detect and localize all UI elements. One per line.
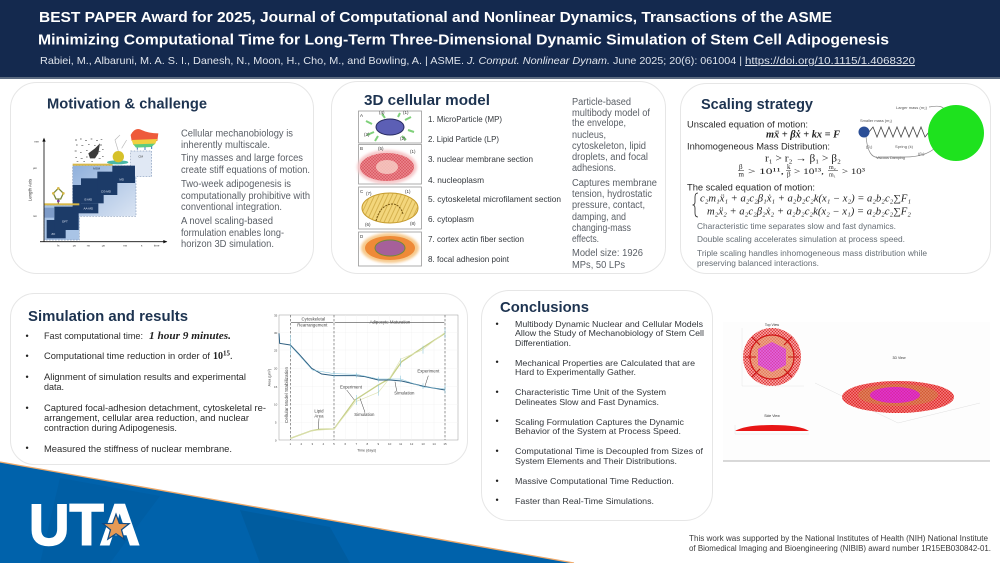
- side view: [735, 414, 809, 434]
- chart: cell and lipid area over time: 25: [274, 348, 278, 352]
- chart: cell and lipid area over time: Simulation: [354, 412, 375, 417]
- chart: length and time scale map: ZC: [51, 232, 56, 236]
- chart: cell and lipid area over time: 2: [300, 442, 302, 446]
- text: results bullets: arrangement, cellular area reduction, and nuclear: [44, 413, 249, 424]
- icon: yellow cell: [107, 160, 128, 164]
- text: model description: Captures membrane: [572, 178, 657, 189]
- figure: cell layers A to D: (1): [410, 149, 416, 154]
- figure: cell layers A to D: (2): [364, 132, 370, 137]
- list: model components: 5. cytoskeletal microfilament section: [428, 194, 561, 204]
- small mass: [858, 126, 870, 138]
- figure: cell layers A to D: [357, 110, 422, 266]
- chart: length and time scale map: CM: [138, 155, 143, 159]
- chart: cell and lipid area over time: 5: [275, 421, 277, 425]
- chart: cell and lipid area over time: 30: [274, 331, 278, 335]
- text: model description: droplets, and focal: [572, 152, 648, 163]
- text: inhomogeneous mass distribution: β: [787, 170, 791, 178]
- text: results bullets: data.: [44, 382, 64, 393]
- text: inhomogeneous mass distribution: m₂: [829, 165, 836, 171]
- big mass: [928, 105, 984, 161]
- text: motivation bullets: Tiny masses and large forces: [181, 153, 303, 164]
- list: model components: 6. cytoplasm: [428, 214, 474, 224]
- chart: cell and lipid area over time: 15: [443, 442, 447, 446]
- header banner: [0, 0, 1000, 79]
- chart: cell and lipid area over time: 13: [421, 442, 425, 446]
- text: motivation bullets: create stiff equations of motion.: [181, 165, 310, 176]
- text: results bullets: contraction during Adipogenesis.: [44, 423, 177, 434]
- text: conclusion bullets: Differentiation.: [515, 338, 571, 348]
- text: inhomogeneous mass distribution: r₁ > r₂ → β₁ > β₂: [765, 154, 841, 164]
- chart: cell and lipid area over time: 0: [275, 438, 277, 442]
- axes: [40, 140, 167, 242]
- text: funding acknowledgement: [689, 534, 991, 553]
- chart: cell and lipid area over time: 14: [432, 442, 436, 446]
- text: conclusion bullets: Delineates Slow and Fast Dynamics.: [515, 397, 659, 407]
- figure: cell layers A to D: C: [360, 189, 364, 194]
- text: scaled equation of motion: The scaled equation of motion:: [687, 182, 815, 194]
- text: motivation bullets: computationally prohibitive with: [181, 191, 310, 202]
- text: model description: damping, and: [572, 212, 626, 223]
- chart: length and time scale map: MD: [119, 178, 125, 182]
- text: conclusion bullets: Computational Time is Decoupled from Sizes of: [515, 446, 704, 456]
- list: model components: 1. MicroParticle (MP): [428, 114, 502, 124]
- figure: cell layers A to D: A: [360, 113, 363, 118]
- text: results bullets: Fast computational time:: [44, 331, 143, 342]
- diagram: two mass spring damper: Viscous Damping: [876, 155, 905, 160]
- chart: cell and lipid area over time: 10: [274, 403, 278, 407]
- text: model description: the envelope,: [572, 118, 626, 129]
- text: model description: multibody model of: [572, 108, 650, 119]
- text: inhomogeneous mass distribution: β: [739, 163, 743, 171]
- chart: cell and lipid area over time: Adipocyte Maturation: [370, 320, 411, 325]
- icon: rainbow surface: [131, 129, 158, 141]
- text: conclusion bullets: Mechanical Properties are Calculated that are: [515, 358, 695, 368]
- text: model description: effects.: [572, 234, 599, 245]
- text: unscaled equation of motion: Unscaled equation of motion:: [687, 120, 808, 130]
- icon: molecule: [53, 188, 63, 204]
- text: motivation bullets: Cellular mechanobiology is: [181, 128, 293, 140]
- text: results bullets: •: [26, 372, 29, 382]
- text: conclusion bullets: •: [496, 319, 499, 329]
- chart: cell and lipid area over time: Time (days): [357, 448, 376, 452]
- chart: cell and lipid area over time: 3: [311, 442, 313, 446]
- text: model description: tension, hydrostatic: [572, 189, 652, 200]
- lipid area curve: [290, 333, 445, 438]
- citation: [40, 55, 915, 67]
- chart: cell and lipid area over time: 1: [289, 442, 291, 446]
- text: results bullets: 10: [213, 351, 223, 362]
- text: results bullets: •: [26, 351, 29, 361]
- figure: cell layers A to D: (7): [366, 191, 372, 196]
- text: inhomogeneous mass distribution: k: [787, 163, 791, 171]
- text: inhomogeneous mass distribution: [687, 142, 866, 178]
- heading: scaling strategy: Scaling strategy: [701, 96, 814, 113]
- text: motivation bullets: inherently multiscale.: [181, 140, 270, 151]
- text: model description: nucleus,: [572, 130, 606, 141]
- chart: length and time scale map: ms: [123, 244, 127, 248]
- chart: cell and lipid area over time: Rearrangement: [297, 322, 328, 327]
- chart: length and time scale map: E-MD: [85, 197, 93, 201]
- citation: June 2025; 20(6): 061004 |: [613, 55, 742, 67]
- text: conclusion bullets: •: [496, 357, 499, 367]
- text: conclusion bullets: Characteristic Time Unit of the System: [515, 387, 666, 397]
- chart: cell and lipid area over time: 35: [274, 313, 278, 317]
- text: scaling bullets: Double scaling accelerates simulation at process speed.: [697, 234, 905, 244]
- text: motivation bullets: A novel scaling-based: [181, 216, 273, 227]
- text: conclusion bullets: •: [496, 446, 499, 456]
- panel: scaling strategy: [680, 84, 990, 274]
- chart: cell and lipid area over time: 9: [377, 442, 379, 446]
- chart: length and time scale map: ps: [73, 244, 76, 248]
- text: unscaled equation of motion: [687, 120, 840, 140]
- text: motivation bullets: horizon 3D simulation.: [181, 239, 274, 250]
- panel: simulation and results: [10, 294, 468, 464]
- text: inhomogeneous mass distribution: > 10³: [842, 166, 866, 176]
- 3D view: [815, 356, 980, 423]
- text: conclusion bullets: Scaling Formulation Captures the Dynamic: [515, 417, 685, 427]
- chart: cell and lipid area over time: [268, 313, 458, 452]
- text: model description: pressure, contact,: [572, 200, 645, 211]
- figure: cell layers A to D: (4): [379, 110, 385, 115]
- text: conclusion bullets: Massive Computational Time Reduction.: [515, 476, 674, 486]
- side view: Side View: [764, 414, 780, 418]
- text: scaling bullets: Triple scaling handles inhomogeneous mass distribution while: [697, 248, 927, 258]
- text: conclusion bullets: Multibody Dynamic Nuclear and Cellular Models: [515, 319, 703, 329]
- text: results bullets: Alignment of simulation results and experimental: [44, 372, 246, 383]
- text: results bullets: [26, 331, 266, 455]
- text: unscaled equation of motion: mẍ + βẋ + kx = F: [766, 130, 840, 140]
- text: results bullets: 15: [223, 350, 230, 358]
- list: model components: 2. Lipid Particle (LP): [428, 134, 499, 144]
- chart: length and time scale map: fs: [57, 244, 60, 248]
- UTA logo: UTA: [29, 493, 140, 558]
- text: results bullets: •: [26, 443, 29, 453]
- text: inhomogeneous mass distribution: Inhomogeneous Mass Distribution:: [687, 142, 830, 152]
- text: model description: [572, 97, 657, 271]
- figure: cell layers A to D: (6): [365, 222, 371, 227]
- diagram: two mass spring damper: (β₁): [866, 144, 873, 149]
- text: conclusion bullets: Allow the Study of Mechanobiology of Stem Cell: [515, 328, 704, 338]
- cell area curve: [279, 333, 445, 390]
- text: model description: Model size: 1926: [572, 248, 643, 259]
- text: conclusion bullets: Hard to Experimentally Gather.: [515, 367, 636, 377]
- text: motivation bullets: conventional integration.: [181, 202, 282, 213]
- text: conclusion bullets: •: [496, 416, 499, 426]
- text: motivation bullets: Two-week adipogenesis is: [181, 179, 291, 190]
- chart: length and time scale map: mm: [34, 139, 40, 143]
- figure: cell layers A to D: D: [360, 234, 364, 239]
- footer blue band: [0, 462, 574, 563]
- diagram: two mass spring damper: [858, 105, 984, 161]
- chart: cell and lipid area over time: 8: [366, 442, 368, 446]
- chart: length and time scale map: ns: [87, 244, 90, 248]
- chart: length and time scale map: CG-MD: [101, 190, 112, 194]
- chart: cell and lipid area over time: Lipid: [314, 408, 324, 413]
- top view: [742, 323, 804, 386]
- text: results bullets: .: [230, 351, 232, 362]
- figure: cell layers A to D: (1): [403, 110, 409, 115]
- panel: motivation and challenge: [10, 82, 314, 274]
- chart: length and time scale map: DFT: [62, 219, 68, 223]
- chart: cell and lipid area over time: 5: [333, 442, 335, 446]
- text: model description: adhesions.: [572, 163, 616, 174]
- top view: Top View: [765, 323, 780, 327]
- chart: length and time scale map: nm: [33, 214, 38, 218]
- text: conclusion bullets: [496, 319, 704, 506]
- heading: simulation and results: Simulation and results: [28, 308, 188, 325]
- figure: cell layers A to D: (1): [405, 189, 411, 194]
- text: conclusion bullets: System Elements and Their Distributions.: [515, 456, 677, 466]
- chart: length and time scale map: Length Axis: [27, 179, 32, 201]
- chart: length and time scale map: time: [154, 244, 160, 248]
- chart: cell and lipid area over time: 6: [344, 442, 346, 446]
- text: model description: MPs, 50 LPs: [572, 260, 625, 271]
- chart: length and time scale map: MSM: [93, 167, 101, 171]
- text: inhomogeneous mass distribution: > 10¹¹,: [748, 166, 784, 176]
- citation: https://doi.org/10.1115/1.4068320: [745, 55, 915, 67]
- text: results bullets: •: [26, 331, 29, 341]
- chart: length and time scale map: s: [141, 244, 143, 248]
- award title: BEST PAPER Award for 2025, Journal of Computational and Nonlinear Dynamics, Transactions of the ASME: [39, 9, 832, 26]
- 3D view: 3D View: [893, 356, 906, 360]
- text: conclusion bullets: Faster than Real-Time Simulations.: [515, 496, 654, 506]
- chart: cell and lipid area over time: Experiment: [340, 384, 363, 389]
- citation: J. Comput. Nonlinear Dynam.: [466, 55, 610, 67]
- list: model components: [428, 114, 561, 264]
- chart: cell and lipid area over time: Experiment: [417, 368, 440, 373]
- text: conclusion bullets: Behavior of the System at Process Speed.: [515, 426, 681, 436]
- chart: cell and lipid area over time: 11: [399, 442, 403, 446]
- list: model components: 4. nucleoplasm: [428, 175, 484, 185]
- list: model components: 8. focal adhesion point: [428, 254, 510, 264]
- text: scaling bullets: preserving balanced interactions.: [697, 258, 819, 268]
- chart: cell and lipid area over time: Area: [314, 414, 324, 419]
- figure: simulated cell views: [723, 322, 990, 461]
- figure: cell layers A to D: (5): [378, 146, 384, 151]
- chart: cell and lipid area over time: 20: [274, 367, 278, 371]
- chart: cell and lipid area over time: Simulation: [394, 391, 415, 396]
- heading: motivation: Motivation & challenge: [47, 96, 207, 112]
- chart: cell and lipid area over time: 15: [274, 385, 278, 389]
- text: model description: cytoskeleton, lipid: [572, 141, 646, 152]
- text: motivation bullets: [181, 128, 310, 250]
- text: scaled equation of motion: [687, 182, 912, 218]
- text: inhomogeneous mass distribution: > 10¹³,: [794, 166, 824, 176]
- heading: 3D cellular model: 3D cellular model: [364, 92, 490, 109]
- text: scaled equation of motion: m₂ẍ₂ + a₂c₂β₂ẋ₂ + a₂b₂c₂k(x₂ − x₁) = a₂b₂c₂∑F₂: [707, 206, 912, 218]
- text: scaling bullets: Characteristic time separates slow and fast dynamics.: [697, 221, 896, 231]
- list: model components: 7. cortex actin fiber section: [428, 234, 524, 244]
- diagram: two mass spring damper: Smaller mass (m₁): [860, 118, 893, 123]
- chart: length and time scale map: [27, 129, 167, 248]
- text: results bullets: 1 hour 9 minutes.: [149, 331, 231, 342]
- text: results bullets: Captured focal-adhesion detachment, cytoskeletal re-: [44, 403, 266, 414]
- text: funding acknowledgement: of Biomedical Imaging and Bioengineering (NIBIB) award number 1R15EB030842-01.: [689, 544, 991, 553]
- icon: star: [105, 516, 127, 538]
- diagram: two mass spring damper: Larger mass (m₂): [896, 105, 928, 110]
- chart: cell and lipid area over time: 12: [410, 442, 414, 446]
- figure: cell layers A to D: (8): [410, 221, 416, 226]
- citation: Rabiei, M., Albaruni, M. A. S. I., Danesh, N., Moon, H., Cho, M., and Bowling, A. | ASME.: [40, 55, 464, 67]
- chart: length and time scale map: AA-MD: [84, 207, 94, 211]
- text: results bullets: •: [26, 403, 29, 413]
- figure: cell layers A to D: (2): [400, 136, 406, 141]
- text: model description: Particle-based: [572, 97, 631, 108]
- list: model components: 3. nuclear membrane section: [428, 154, 533, 164]
- figure: cell layers A to D: B: [360, 146, 363, 151]
- text: inhomogeneous mass distribution: m: [738, 170, 744, 178]
- text: motivation bullets: formulation enables long-: [181, 228, 284, 239]
- diagram: two mass spring damper: Spring (k): [895, 144, 914, 149]
- text: funding acknowledgement: This work was supported by the National Institutes of Health (NIH) National Institute: [689, 534, 988, 543]
- text: conclusion bullets: •: [496, 476, 499, 486]
- chart: cell and lipid area over time: Cytoskeletal: [302, 316, 325, 321]
- chart: cell and lipid area over time: 10: [388, 442, 392, 446]
- chart: length and time scale map: μs: [102, 244, 105, 248]
- diagram: two mass spring damper: (β₂): [918, 151, 925, 156]
- text: scaled equation of motion: c₂m₁ẍ₁ + a₂c₂β₁ẋ₁ + a₂b₂c₂k(x₁ − x₂) = a₂b₂c₂∑F₁: [700, 194, 911, 204]
- text: model description: changing-mass: [572, 223, 631, 234]
- text: inhomogeneous mass distribution: m₁: [829, 172, 836, 178]
- text: scaling bullets: [697, 221, 927, 268]
- chart: cell and lipid area over time: Area (μm²): [268, 369, 272, 386]
- paper title: Minimizing Computational Time for Long-Term Three-Dimensional Dynamic Simulation of Stem Cell Adipogenesis: [38, 32, 889, 48]
- heading: conclusions: Conclusions: [500, 299, 589, 316]
- chart: cell and lipid area over time: Cellular Model Stabilization: [284, 367, 289, 423]
- icon: particle cloud: [75, 139, 104, 162]
- text: results bullets: Measured the stiffness of nuclear membrane.: [44, 444, 232, 455]
- text: conclusion bullets: •: [496, 495, 499, 505]
- panel: conclusions: [482, 290, 712, 520]
- chart: cell and lipid area over time: 4: [322, 442, 324, 446]
- panel: 3D cellular model: [332, 82, 666, 274]
- chart: cell and lipid area over time: 7: [355, 442, 357, 446]
- chart: length and time scale map: μm: [33, 166, 38, 170]
- text: conclusion bullets: •: [496, 387, 499, 397]
- text: results bullets: Computational time reduction in order of: [44, 351, 210, 362]
